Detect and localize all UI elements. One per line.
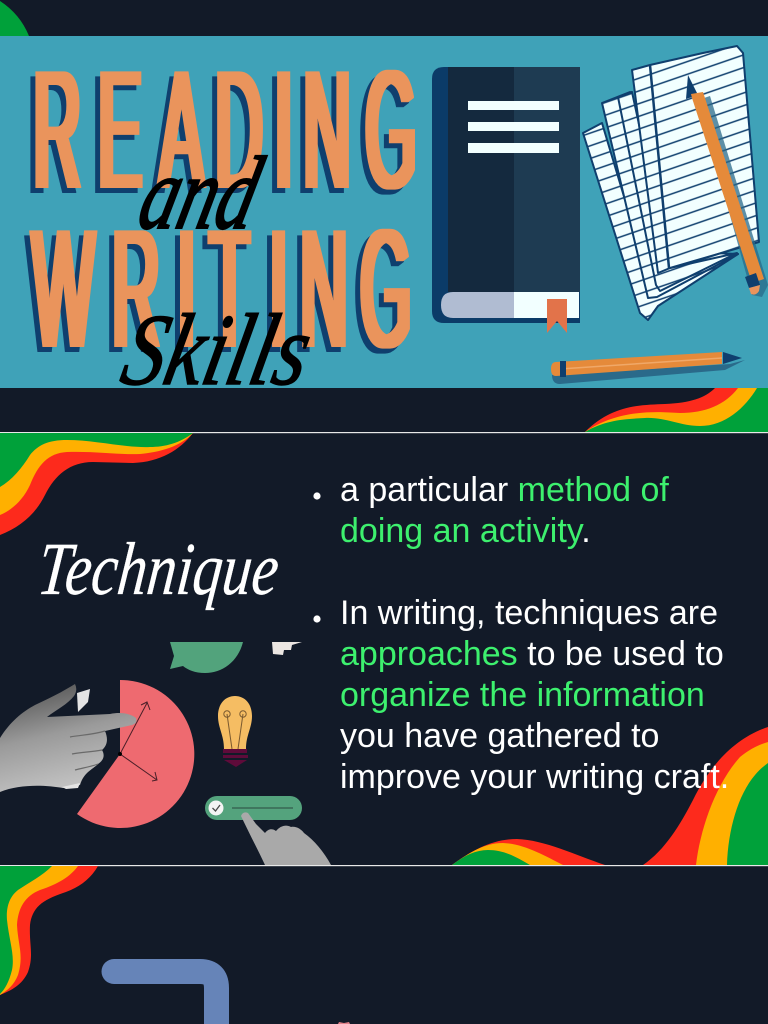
- illustration: collage: [0, 642, 331, 865]
- bullet one: doing an activity.: [340, 512, 591, 550]
- wave: technique slide upper left: [0, 433, 193, 535]
- arrow: blue corner: [114, 972, 216, 1024]
- paper scrap: [272, 642, 302, 655]
- pie chart with arrows: [77, 680, 194, 828]
- checklist pill: [205, 796, 302, 820]
- script word: and: and: [129, 135, 273, 251]
- wave: technique slide lower hump: [452, 839, 605, 865]
- icon: pencil on paper: [686, 75, 768, 297]
- banner panel: [0, 36, 768, 407]
- bullet two: you have gathered to: [340, 717, 659, 755]
- icon: light bulb: [218, 696, 252, 767]
- bullet two: improve your writing craft.: [340, 758, 729, 796]
- bullet two: [313, 594, 729, 796]
- bullet two: organize the information: [340, 676, 705, 714]
- pink fragment at lower edge: [338, 1022, 350, 1024]
- wave: banner lower right: [585, 388, 768, 432]
- heading: WRITING: WRITING: [32, 196, 411, 383]
- bullet one: a particular method of: [340, 471, 669, 509]
- heading: READING: READING: [34, 37, 416, 224]
- bullet two: In writing, techniques are: [340, 594, 718, 632]
- title: Technique: Technique: [34, 528, 283, 611]
- photo: hand pointing at the chart: [0, 684, 136, 792]
- bullet two: approaches to be used to: [340, 635, 724, 673]
- wave: technique slide lower right: [643, 727, 768, 865]
- photo: finger tapping the pill: [241, 812, 331, 865]
- wave: third slide upper left: [0, 866, 98, 995]
- icon: sheets of ruled paper: [583, 46, 759, 320]
- script word: Skills: Skills: [113, 294, 321, 407]
- wave: top-left corner of first slide: [0, 1, 29, 36]
- icon: speech bubble: [170, 642, 243, 673]
- icon: pencil lying flat: [551, 352, 745, 384]
- text block: definition bullets: [313, 471, 729, 796]
- icon: closed book: [432, 67, 580, 333]
- bullet one: [313, 471, 669, 550]
